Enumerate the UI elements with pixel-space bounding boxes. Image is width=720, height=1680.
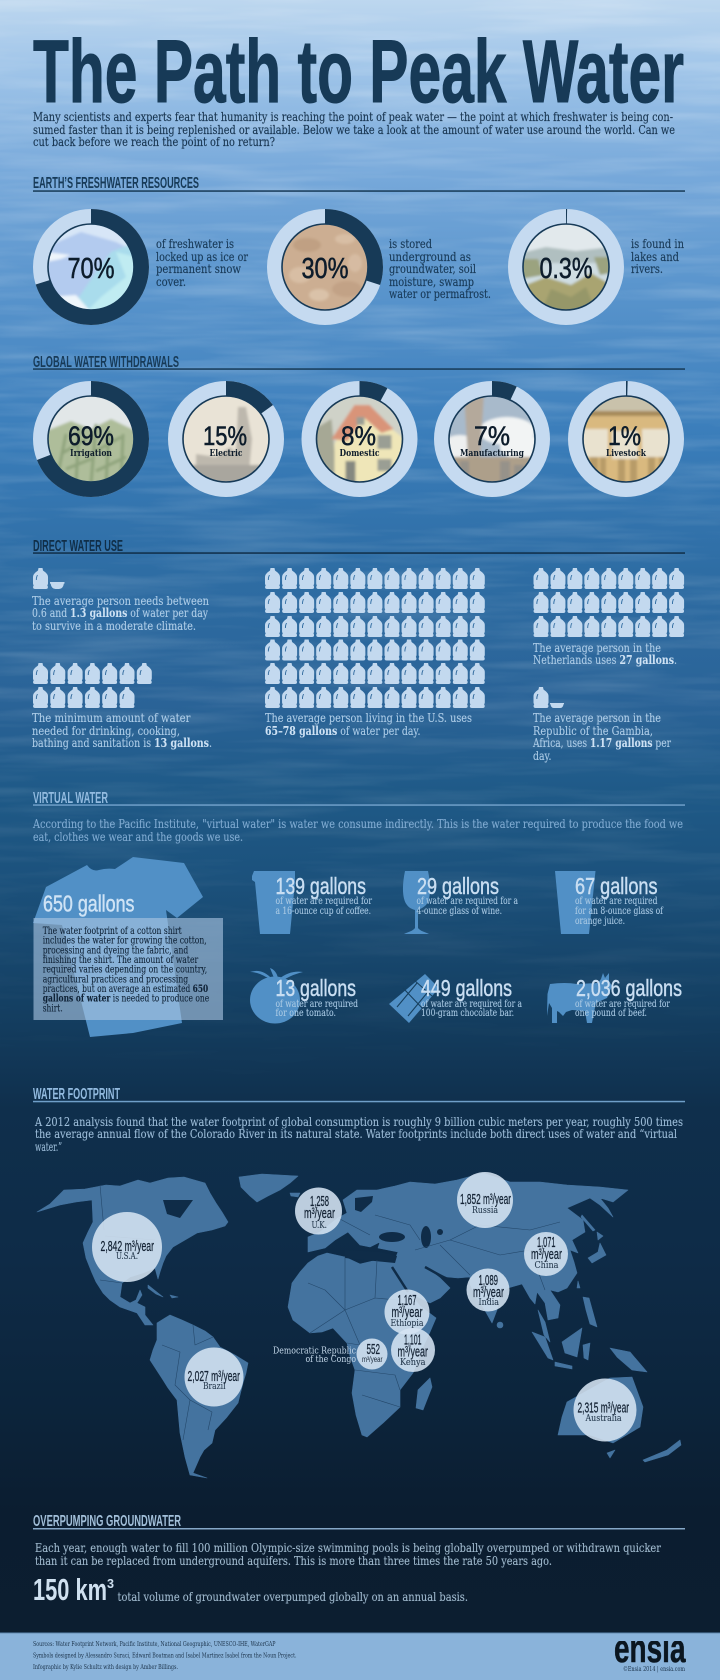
bubble: U.K.: 1,258 <box>310 1193 329 1210</box>
donut: 69% irrigation: Irrigation <box>70 449 112 459</box>
donut: 8% domestic <box>309 388 410 490</box>
text: 0.3% description: lakes and <box>631 249 679 264</box>
donut: 0.3% lake: 0.3% <box>540 253 592 285</box>
icon: jug and sliver, 1.17 gallons <box>534 687 564 708</box>
text box: shirt footprint: The water footprint of a cotton shirt <box>43 926 182 937</box>
stat: 150 km3: 3 <box>107 1576 114 1591</box>
bubble: U.K.: m³/year <box>304 1205 335 1222</box>
borders <box>100 1185 560 1440</box>
bubble: Democratic Republic of the Congo: of the Congo <box>306 1355 356 1365</box>
bubble: Democratic Republic of the Congo: m³/year <box>362 1355 383 1364</box>
copyright: ©Ensia 2014 | ensia.com <box>623 1666 685 1673</box>
donut: 30% soil <box>274 216 376 318</box>
text box: shirt footprint: includes the water for growing the cotton, <box>43 936 207 947</box>
donut: 70% ice: 70% <box>68 253 114 285</box>
intro paragraph: cut back before we reach the point of no return? <box>33 134 275 149</box>
text: 0.3% description: rivers. <box>631 261 663 276</box>
bubble: Democratic Republic of the Congo: 552 <box>366 1341 380 1358</box>
bubble: U.K. <box>295 1188 342 1234</box>
text: 30% description: underground as <box>389 249 471 264</box>
logo: ensia: ensia <box>614 1627 686 1671</box>
south america <box>150 1315 248 1478</box>
text: 0.3% description: is found in <box>631 236 684 251</box>
text: virtual water intro: eat, clothes we wear and the goods we use. <box>33 829 243 844</box>
heading: overpumping groundwater: OVERPUMPING GROUNDWATER <box>33 1513 181 1530</box>
text: U.S. use <box>265 710 472 738</box>
bubble: Russia: 1,852 m³/year <box>460 1191 511 1208</box>
icon: juice glass <box>555 871 596 934</box>
item: coffee: of water are required for <box>276 896 372 907</box>
bubble: India: m³/year <box>473 1284 504 1301</box>
text: overpumping description <box>35 1540 661 1568</box>
heading: global water withdrawals: GLOBAL WATER WITHDRAWALS <box>33 354 179 371</box>
text: minimum amount: needed for drinking, cooking, <box>32 723 180 738</box>
donut: 69% irrigation: 69% <box>68 421 114 451</box>
text box: shirt footprint: gallons of water is needed to produce one <box>43 994 209 1005</box>
text box: shirt footprint: processing and dyeing the fabric, and <box>43 945 189 956</box>
bubble: U.S.A.: 2,842 m³/year <box>100 1238 154 1255</box>
item: tomato: of water are required <box>276 999 358 1010</box>
text: minimum amount <box>32 710 212 750</box>
item: beef: of water are required for <box>575 999 670 1010</box>
item: chocolate: 100-gram chocolate bar. <box>421 1008 514 1019</box>
text: minimum amount: bathing and sanitation is 13 gallons. <box>32 735 212 750</box>
item: coffee: a 16-ounce cup of coffee. <box>276 906 371 917</box>
bubble: India <box>466 1268 510 1312</box>
stat: 150 km3 <box>33 1572 468 1607</box>
bubble: Australia <box>574 1378 636 1442</box>
donut: 30% soil: 30% <box>302 253 348 285</box>
bubble: U.S.A.: U.S.A. <box>116 1252 138 1262</box>
bubble: Australia: Australia <box>585 1414 622 1424</box>
bubble: Brazil: 2,027 m³/year <box>188 1368 240 1385</box>
donut: 7% manufacturing: Manufacturing <box>460 449 525 459</box>
text: Netherlands use: Netherlands uses 27 gallons. <box>533 652 677 667</box>
bubble: Kenya: Kenya <box>400 1358 426 1368</box>
footer <box>0 1627 720 1680</box>
item: wine: 4-ounce glass of wine. <box>416 906 502 917</box>
item: chocolate: of water are required for a <box>421 999 522 1010</box>
stat: 150 km3: total volume of groundwater overpumped globally on an annual basis. <box>118 1589 468 1604</box>
donut: 7% manufacturing: 7% <box>474 421 510 451</box>
item: orange juice: 67 gallons <box>575 873 658 899</box>
bubble: Kenya <box>391 1328 435 1372</box>
bubble: China: China <box>534 1261 559 1271</box>
item: chocolate <box>389 974 522 1023</box>
africa <box>288 1253 436 1437</box>
text: 70% description: cover. <box>156 274 186 289</box>
donut: 15% electric <box>176 388 276 490</box>
text box: shirt footprint: required varies depending on the country, <box>43 965 207 976</box>
item: chocolate: 449 gallons <box>421 975 512 1001</box>
text: footprint intro: water.” <box>35 1139 62 1154</box>
icon: jug and half cup, 1.3 gallons <box>33 568 64 589</box>
icon: 27 jugs <box>534 568 684 637</box>
heading: water footprint: WATER FOOTPRINT <box>33 1086 120 1103</box>
donut: 1% livestock: Livestock <box>606 449 647 459</box>
text: Gambia use: Republic of the Gambia, <box>533 723 653 738</box>
panel: direct water use <box>32 538 685 763</box>
text box: shirt footprint: 650 gallons <box>43 891 134 917</box>
text: survival need: The average person needs between <box>32 593 209 608</box>
world map <box>37 1173 681 1478</box>
donut: 8% domestic: Domestic <box>340 449 380 459</box>
item: wine: of water are required for a <box>416 896 518 907</box>
item: tomato: 13 gallons <box>276 975 356 1001</box>
text box: shirt footprint: finishing the shirt. The amount of water <box>43 955 198 966</box>
text: survival need: 0.6 and 1.3 gallons of water per day <box>32 605 209 620</box>
icon: coffee cup <box>252 871 295 934</box>
text: 70% description <box>156 236 248 289</box>
sources and credits: Symbols designed by Alessandro Suraci, Edward Boatman and Isabel Martinez Isabel from the Noun Project. <box>33 1652 296 1660</box>
donut: 69% irrigation <box>40 388 142 490</box>
text: minimum amount: The minimum amount of water <box>32 710 191 725</box>
bubble: Democratic Republic of the Congo: Democratic Republic <box>273 1346 356 1356</box>
bubble: China <box>524 1232 568 1276</box>
bubble: Australia: 2,315 m³/year <box>578 1400 629 1416</box>
donut: 15% electric: 15% <box>203 421 247 451</box>
bubble: U.K.: U.K. <box>312 1221 327 1231</box>
text: footprint intro <box>34 1114 683 1154</box>
text: 30% description: water or permafrost. <box>389 286 491 301</box>
icon: tomato <box>250 968 303 1024</box>
text: U.S. use: 65–78 gallons of water per day. <box>265 723 420 738</box>
bubble: Ethiopia: m³/year <box>392 1304 422 1321</box>
text: U.S. use: The average person living in the U.S. uses <box>265 710 472 725</box>
bubble: India: India <box>478 1298 500 1308</box>
item: beef <box>547 973 682 1023</box>
text: Netherlands use <box>533 640 677 667</box>
text: 30% description <box>389 236 491 301</box>
islands <box>148 1193 681 1462</box>
heading: virtual water: VIRTUAL WATER <box>33 790 108 807</box>
intro paragraph <box>33 109 675 149</box>
item: wine: 29 gallons <box>417 873 499 899</box>
bubble: Brazil: Brazil <box>203 1382 226 1392</box>
text: 30% description: moisture, swamp <box>389 274 474 289</box>
item: beef: 2,036 gallons <box>576 975 682 1001</box>
donut: 1% livestock: 1% <box>608 421 641 451</box>
text: Gambia use: day. <box>533 748 552 763</box>
donut: 8% domestic: 8% <box>341 421 376 451</box>
greenland <box>239 1174 298 1202</box>
inland seas <box>163 1196 443 1292</box>
sources and credits <box>33 1641 296 1671</box>
text: 30% description: is stored <box>389 236 432 251</box>
item: coffee <box>252 871 372 934</box>
text: 30% description: groundwater, soil <box>389 261 476 276</box>
bubble: India: 1,089 <box>478 1272 498 1289</box>
item: orange juice: of water are required <box>575 896 658 907</box>
item: tomato <box>250 968 358 1024</box>
icon: 13 jugs <box>33 663 152 708</box>
madagascar <box>416 1378 432 1410</box>
donut: 15% electric: Electric <box>210 449 243 459</box>
text: Gambia use: The average person in the <box>533 710 661 725</box>
item: tomato: for one tomato. <box>276 1008 336 1019</box>
stat: 150 km3: 150 km <box>33 1572 107 1607</box>
bubble: Kenya: m³/year <box>398 1344 428 1360</box>
north america <box>37 1177 228 1325</box>
bubble: Russia: Russia <box>472 1206 499 1216</box>
bubble: Democratic Republic of the Congo <box>273 1338 388 1370</box>
text box: shirt footprint <box>34 891 223 1020</box>
item: beef: one pound of beef. <box>575 1008 647 1019</box>
text: survival need: to survive in a moderate climate. <box>32 618 196 633</box>
text: survival need <box>32 593 209 633</box>
text box: shirt footprint: practices, but on average an estimated 650 <box>43 984 208 995</box>
text: Netherlands use: The average person in the <box>533 640 661 655</box>
icon: chocolate bar <box>389 974 439 1023</box>
text: Gambia use: Africa, uses 1.17 gallons per <box>532 735 671 750</box>
text: virtual water intro <box>32 816 683 844</box>
icon: cow <box>547 973 612 1023</box>
heading: direct water use: DIRECT WATER USE <box>33 538 123 555</box>
bubble: Russia <box>457 1172 513 1228</box>
donut: 0.3% lake <box>516 216 616 318</box>
donut: 1% livestock <box>576 388 676 490</box>
text: 70% description: of freshwater is <box>156 236 234 251</box>
text: 70% description: locked up as ice or <box>156 249 248 264</box>
text box: shirt footprint: agricultural practices and processing <box>43 974 189 985</box>
donut: 70% ice <box>40 216 142 318</box>
item: wine <box>403 871 518 934</box>
icon: t-shirt <box>33 857 203 1037</box>
text box: shirt footprint: shirt. <box>43 1003 63 1014</box>
item: orange juice: orange juice. <box>575 916 625 927</box>
bubble: U.S.A. <box>92 1212 162 1282</box>
sources and credits: Sources: Water Footprint Network, Pacific Institute, National Geographic, UNESCO-IHE, WaterGAP <box>33 1641 276 1648</box>
sources and credits: Infographic by Kylie Schultz with design by Amber Billings. <box>33 1664 178 1671</box>
panel: overpumping groundwater <box>33 1513 685 1607</box>
panel: water footprint <box>33 1086 685 1478</box>
icon: wine glass <box>403 871 430 934</box>
bubble: Ethiopia: Ethiopia <box>390 1319 424 1329</box>
panel: earth's freshwater resources <box>33 175 685 318</box>
bubble: Brazil <box>184 1348 244 1406</box>
panel: virtual water <box>32 790 685 1037</box>
heading: earth's freshwater resources: EARTH’S FRESHWATER RESOURCES <box>33 175 199 192</box>
item: orange juice <box>555 871 664 934</box>
text: overpumping description: than it can be replaced from underground aquifers. This is more than three times the rate 50 years ago. <box>35 1553 552 1568</box>
bubble: Ethiopia: 1,167 <box>398 1292 416 1309</box>
donut: 7% manufacturing <box>442 388 544 490</box>
bubble: China: m³/year <box>531 1246 562 1263</box>
eurasia <box>308 1173 628 1323</box>
item: orange juice: for an 8-ounce glass of <box>575 906 664 917</box>
panel: global water withdrawals <box>33 354 685 490</box>
text: 0.3% description <box>631 236 684 276</box>
bubble: Kenya: 1,101 <box>404 1332 422 1348</box>
item: coffee: 139 gallons <box>276 873 366 899</box>
bubble: China: 1,071 <box>537 1234 556 1251</box>
text: Gambia use <box>532 710 671 763</box>
bubble: Ethiopia <box>384 1290 430 1334</box>
text: 70% description: permanent snow <box>156 261 241 276</box>
icon: 78 jugs <box>265 568 485 708</box>
